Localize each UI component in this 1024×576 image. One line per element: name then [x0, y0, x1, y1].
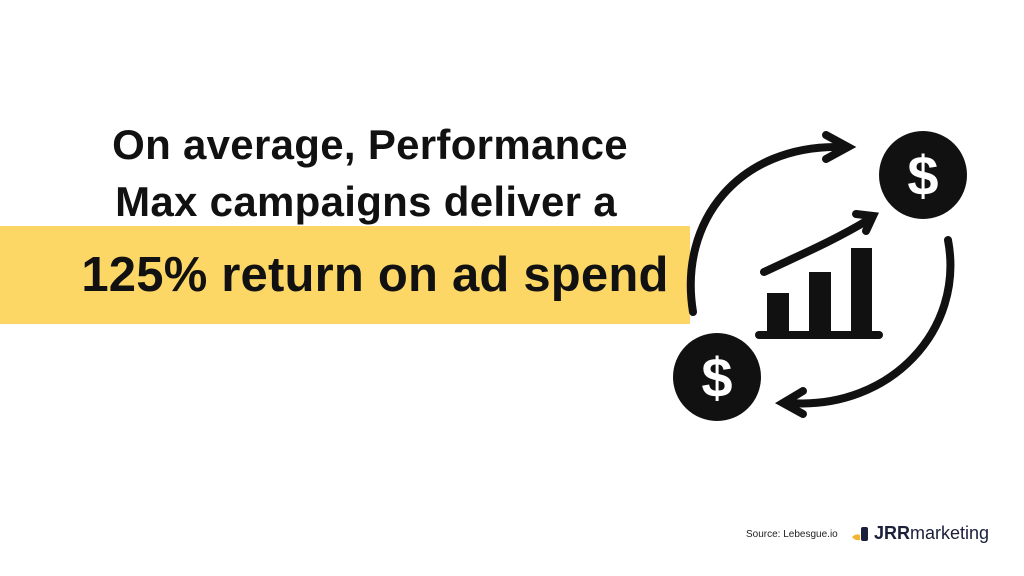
- coin bottom left: $: [701, 346, 733, 409]
- logo: [852, 522, 989, 543]
- coin top right: $: [907, 144, 939, 207]
- bar chart: [755, 248, 883, 339]
- headline line 1: On average, Performance: [112, 121, 628, 168]
- source: Source: Lebesgue.io: [746, 529, 838, 540]
- trend arrow: [764, 214, 873, 272]
- logo mark: [852, 527, 868, 541]
- logo text: JRRmarketing: [874, 522, 989, 542]
- right arc arrow: [783, 240, 950, 414]
- coin top right: [879, 131, 967, 219]
- coin bottom left: [673, 333, 761, 421]
- headline line 2: Max campaigns deliver a: [115, 178, 617, 225]
- headline highlight: 125% return on ad spend: [81, 248, 669, 302]
- highlight band: [0, 226, 690, 324]
- left arc arrow: [691, 135, 848, 312]
